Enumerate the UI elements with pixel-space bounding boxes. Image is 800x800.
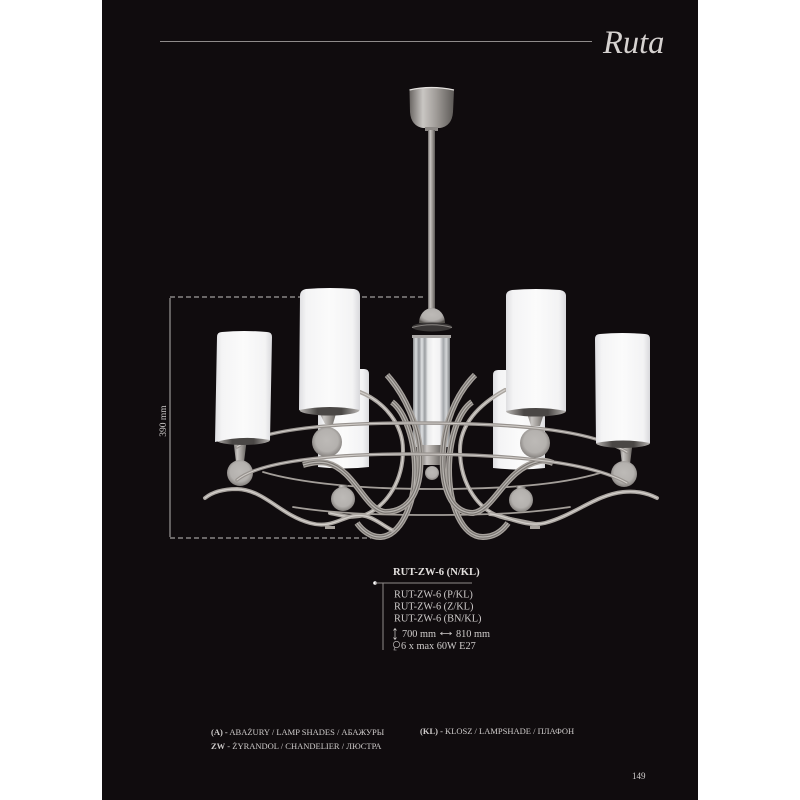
back shades: [318, 369, 545, 470]
legend: (A) - ABAŻURY / LAMP SHADES / АБАЖУРЫ: [211, 727, 385, 737]
central glass column: [412, 308, 452, 480]
product specification block: 6 x max 60W E27: [401, 641, 476, 652]
product specification block: RUT-ZW-6 (N/KL): [393, 567, 480, 578]
dimension: height 390 mm: 390 mm: [159, 405, 169, 437]
legend: ZW - ŻYRANDOL / CHANDELIER / ЛЮСТРА: [211, 741, 382, 751]
icon: height arrow: [394, 628, 396, 640]
legend: (KL) - KLOSZ / LAMPSHADE / ПЛАФОН: [420, 726, 574, 736]
icon: width arrow: [440, 632, 452, 635]
front shades: [215, 288, 650, 448]
upper rings: [237, 423, 627, 483]
product specification block: 700 mm: [402, 629, 436, 640]
ceiling canopy and rod: [410, 88, 454, 310]
product specification block: 810 mm: [456, 629, 490, 640]
legend: [211, 726, 574, 751]
front balls: [227, 427, 637, 487]
black page panel: [102, 0, 698, 800]
product specification block: RUT-ZW-6 (BN/KL): [394, 614, 481, 624]
shade necks: [233, 410, 633, 464]
back balls: [331, 485, 533, 512]
product specification block: RUT-ZW-6 (Z/KL): [394, 602, 473, 612]
lower rings: [263, 472, 600, 515]
icon: bulb: [393, 641, 400, 650]
chandelier: [205, 88, 657, 537]
page number: 149: [632, 771, 646, 781]
title: Ruta with rule: Ruta: [602, 25, 664, 61]
curved arms: [205, 375, 657, 537]
product specification block: RUT-ZW-6 (P/KL): [394, 590, 473, 600]
product specification block: [373, 567, 490, 652]
